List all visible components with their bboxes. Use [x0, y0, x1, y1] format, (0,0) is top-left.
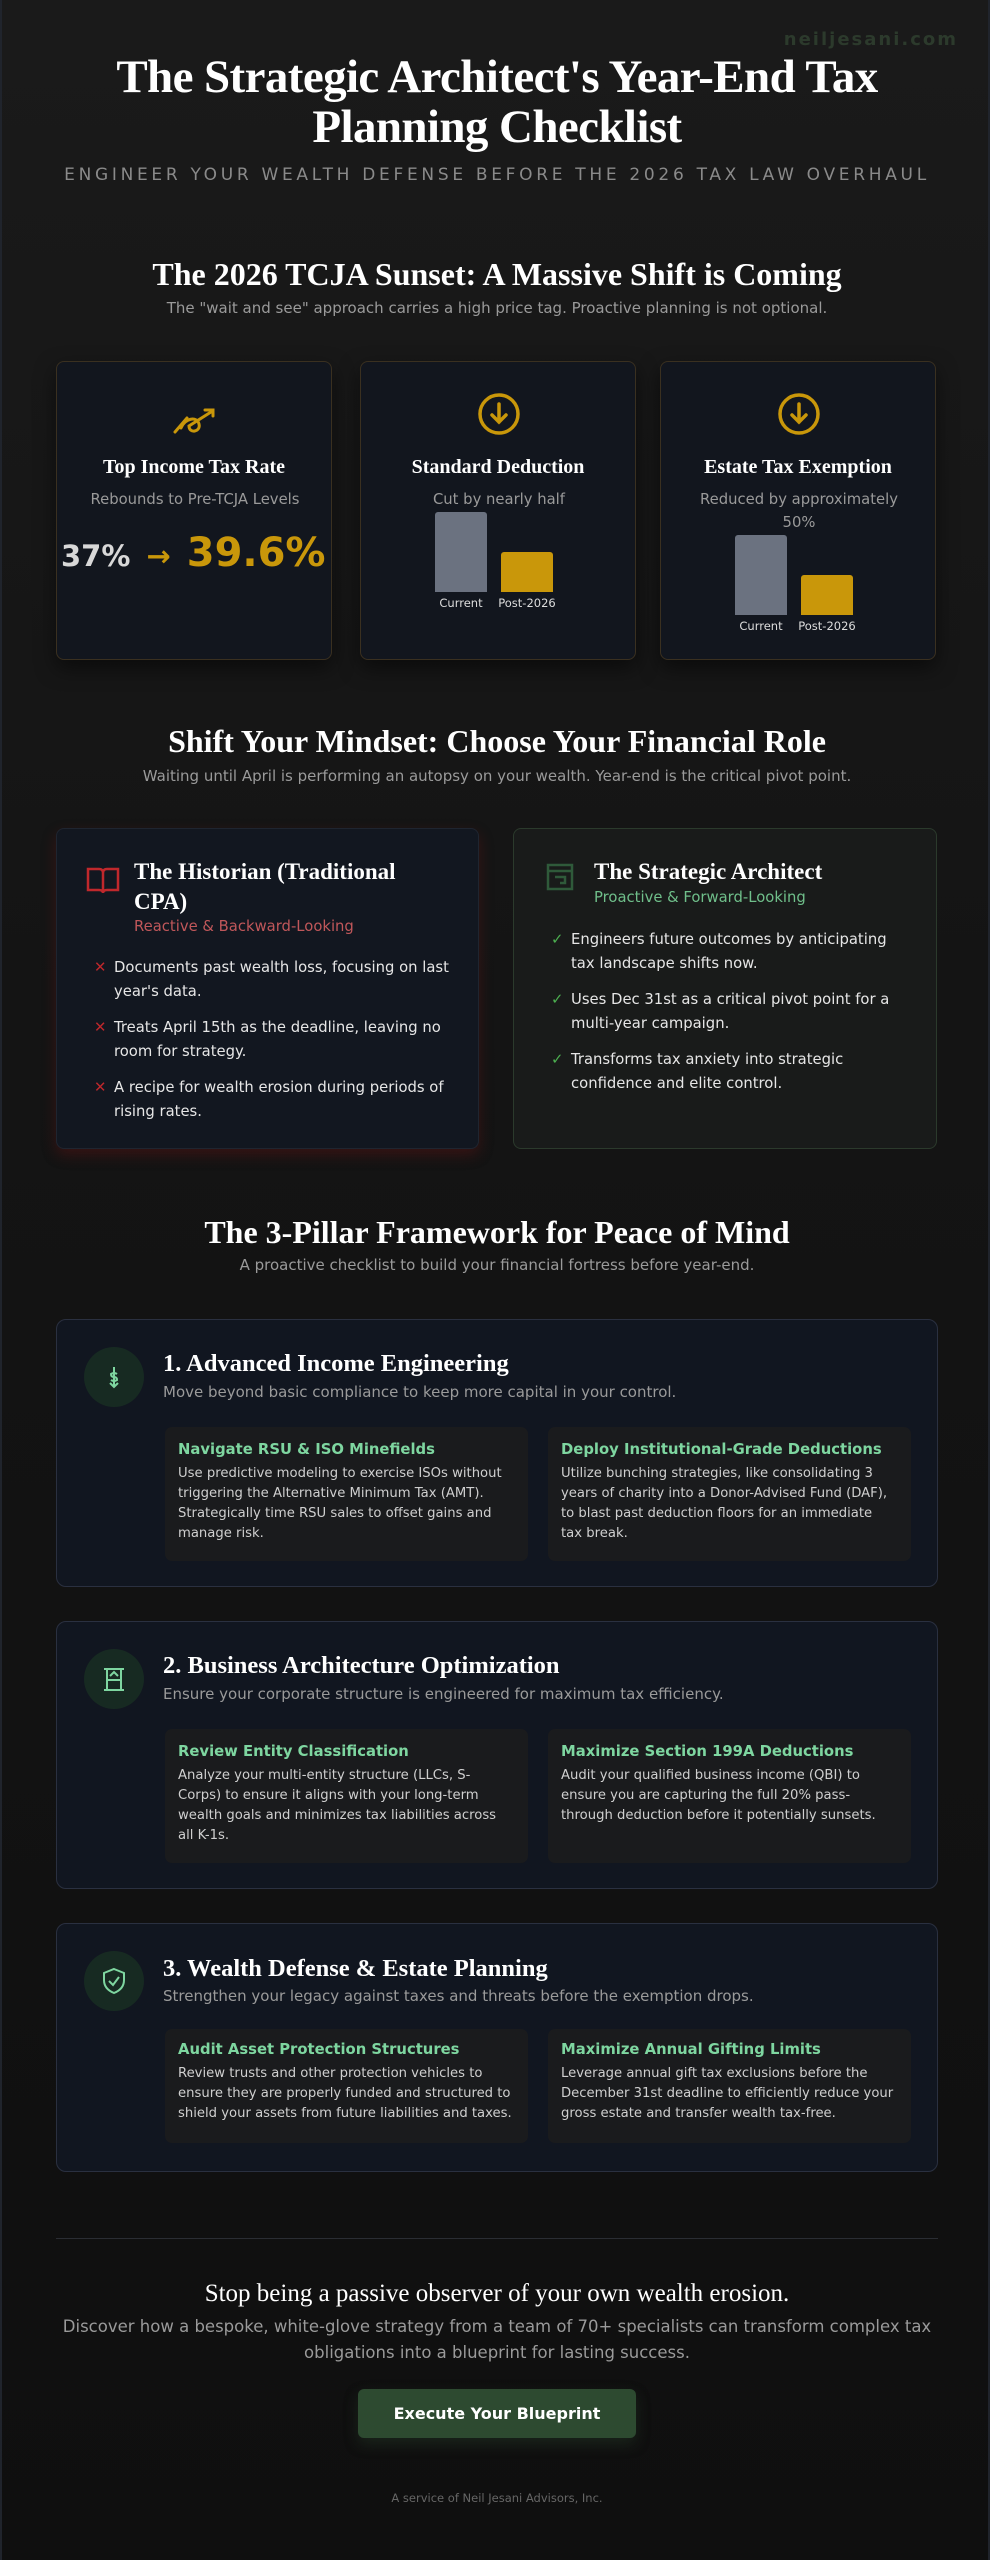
section subtext: Waiting until April is performing an autopsy on your wealth. Year-end is the critical pivot point.	[143, 767, 851, 785]
big number: 37% → 39.6%	[61, 530, 326, 576]
card: gifting	[548, 2029, 911, 2143]
card: RSU ISO: Navigate RSU & ISO Minefields	[178, 1441, 435, 1458]
watermark: neiljesani.com	[784, 29, 958, 50]
icon: down arrow circle	[778, 393, 820, 435]
card: RSU ISO: Use predictive modeling to exercise ISOs without triggering the Alternative Minimum Tax (AMT). Strategically time RSU sales to offset gains and manage risk.	[178, 1466, 502, 1541]
stat card: standard deduction: Standard Deduction	[412, 456, 584, 478]
description: Move beyond basic compliance to keep more capital in your control.	[163, 1383, 676, 1401]
section subtext: The "wait and see" approach carries a high price tag. Proactive planning is not optional.	[167, 299, 827, 317]
card: 199A: Audit your qualified business income (QBI) to ensure you are capturing the full 20% pass-through deduction before it potentially sunsets.	[561, 1768, 876, 1823]
card: deductions	[548, 1427, 911, 1561]
stat card: standard deduction: Cut by nearly half	[433, 491, 565, 508]
section heading: mindset: Shift Your Mindset: Choose Your Financial Role	[168, 723, 826, 759]
stat card: estate tax exemption: Reduced by approximately 50%	[700, 491, 898, 531]
icon: trend squiggle	[173, 408, 214, 434]
panel: historian: ✕	[94, 959, 106, 976]
list	[94, 959, 449, 1120]
bar chart	[735, 535, 856, 633]
panel: pillar 1	[56, 1319, 938, 1587]
bar chart: Post-2026	[498, 596, 556, 610]
footer: A service of Neil Jesani Advisors, Inc.	[391, 2491, 603, 2505]
card: RSU ISO	[165, 1427, 528, 1561]
card: gifting: Leverage annual gift tax exclusions before the December 31st deadline to efficiently reduce your gross estate and transfer wealth tax-free.	[561, 2066, 893, 2121]
heading: The Strategic Architect	[594, 859, 822, 884]
panel: strategic architect: ✓	[551, 931, 563, 948]
title: The Strategic Architect's Year-End Tax	[116, 51, 878, 103]
card: asset protection: Audit Asset Protection Structures	[178, 2041, 459, 2058]
icon: shield	[84, 1951, 144, 2011]
heading: 2. Business Architecture Optimization	[163, 1652, 560, 1679]
CTA text: Discover how a bespoke, white-glove strategy from a team of 70+ specialists can transform complex tax obligations into a blueprint for lasting success.	[63, 2317, 931, 2362]
heading: 1. Advanced Income Engineering	[163, 1350, 509, 1377]
card: entity: Review Entity Classification	[178, 1743, 409, 1760]
icon: dollar arrow	[84, 1347, 144, 1407]
card: 199A	[548, 1729, 911, 1863]
icon: down arrow circle	[478, 393, 520, 435]
heading: The Historian (Traditional CPA)	[134, 859, 396, 914]
list: Treats April 15th as the deadline, leaving no room for strategy.	[114, 1019, 441, 1060]
panel: pillar 2	[56, 1621, 938, 1889]
panel: strategic architect: ✓	[551, 1051, 563, 1068]
section heading: TCJA sunset: The 2026 TCJA Sunset: A Massive Shift is Coming	[152, 256, 842, 292]
stat card: top income tax rate: Top Income Tax Rate	[103, 456, 285, 478]
bar chart	[435, 512, 556, 610]
tagline: Reactive & Backward-Looking	[134, 918, 354, 935]
list: Transforms tax anxiety into strategic confidence and elite control.	[571, 1051, 843, 1092]
list: Uses Dec 31st as a critical pivot point for a multi-year campaign.	[571, 991, 889, 1032]
section subtext: A proactive checklist to build your financial fortress before year-end.	[240, 1256, 754, 1274]
list: Documents past wealth loss, focusing on last year's data.	[114, 959, 449, 1000]
CTA heading: Stop being a passive observer of your own wealth erosion.	[205, 2280, 789, 2307]
card: entity: Analyze your multi-entity structure (LLCs, S-Corps) to ensure it aligns with your long-term wealth goals and minimizes tax liabilities across all K-1s.	[178, 1768, 496, 1843]
panel: pillar 3	[56, 1923, 938, 2172]
description: Ensure your corporate structure is engineered for maximum tax efficiency.	[163, 1685, 724, 1703]
icon: building	[84, 1649, 144, 1709]
card: entity	[165, 1729, 528, 1863]
stat card: standard deduction	[360, 361, 636, 660]
stat card: estate tax exemption: Estate Tax Exemption	[704, 456, 892, 478]
heading: 3. Wealth Defense & Estate Planning	[163, 1955, 548, 1982]
icon: blueprint	[546, 864, 574, 890]
CTA button	[358, 2389, 636, 2438]
stat card: top income tax rate: Rebounds to Pre-TCJA Levels	[90, 491, 300, 508]
subtitle: ENGINEER YOUR WEALTH DEFENSE BEFORE THE 2026 TAX LAW OVERHAUL	[64, 165, 930, 185]
card: asset protection: Review trusts and other protection vehicles to ensure they are properly funded and structured to shield your assets from future liabilities and taxes.	[178, 2066, 512, 2121]
tagline: Proactive & Forward-Looking	[594, 889, 806, 906]
list: A recipe for wealth erosion during periods of rising rates.	[114, 1079, 444, 1120]
section heading: 3-pillar: The 3-Pillar Framework for Peace of Mind	[204, 1214, 790, 1250]
card: asset protection	[165, 2029, 528, 2143]
stat card: top income tax rate	[56, 361, 332, 660]
stat card: estate tax exemption	[660, 361, 936, 660]
CTA button: Execute Your Blueprint	[394, 2404, 600, 2423]
panel: strategic architect	[513, 828, 937, 1149]
bar chart: Current	[439, 596, 483, 610]
title	[116, 51, 878, 153]
icon: book	[86, 868, 120, 893]
card: deductions: Utilize bunching strategies, like consolidating 3 years of charity into a Donor-Advised Fund (DAF), to blast past deduction floors for an immediate tax break.	[561, 1466, 887, 1541]
panel: historian: ✕	[94, 1079, 106, 1096]
card: 199A: Maximize Section 199A Deductions	[561, 1743, 853, 1760]
card: deductions: Deploy Institutional-Grade Deductions	[561, 1441, 882, 1458]
card: gifting: Maximize Annual Gifting Limits	[561, 2041, 821, 2058]
panel: historian: ✕	[94, 1019, 106, 1036]
bar chart: Post-2026	[798, 619, 856, 633]
title: Planning Checklist	[312, 101, 682, 153]
list: Engineers future outcomes by anticipating tax landscape shifts now.	[571, 931, 887, 972]
description: Strengthen your legacy against taxes and threats before the exemption drops.	[163, 1987, 754, 2005]
panel: historian	[56, 828, 479, 1149]
list	[551, 931, 889, 1092]
panel: strategic architect: ✓	[551, 991, 563, 1008]
bar chart: Current	[739, 619, 783, 633]
